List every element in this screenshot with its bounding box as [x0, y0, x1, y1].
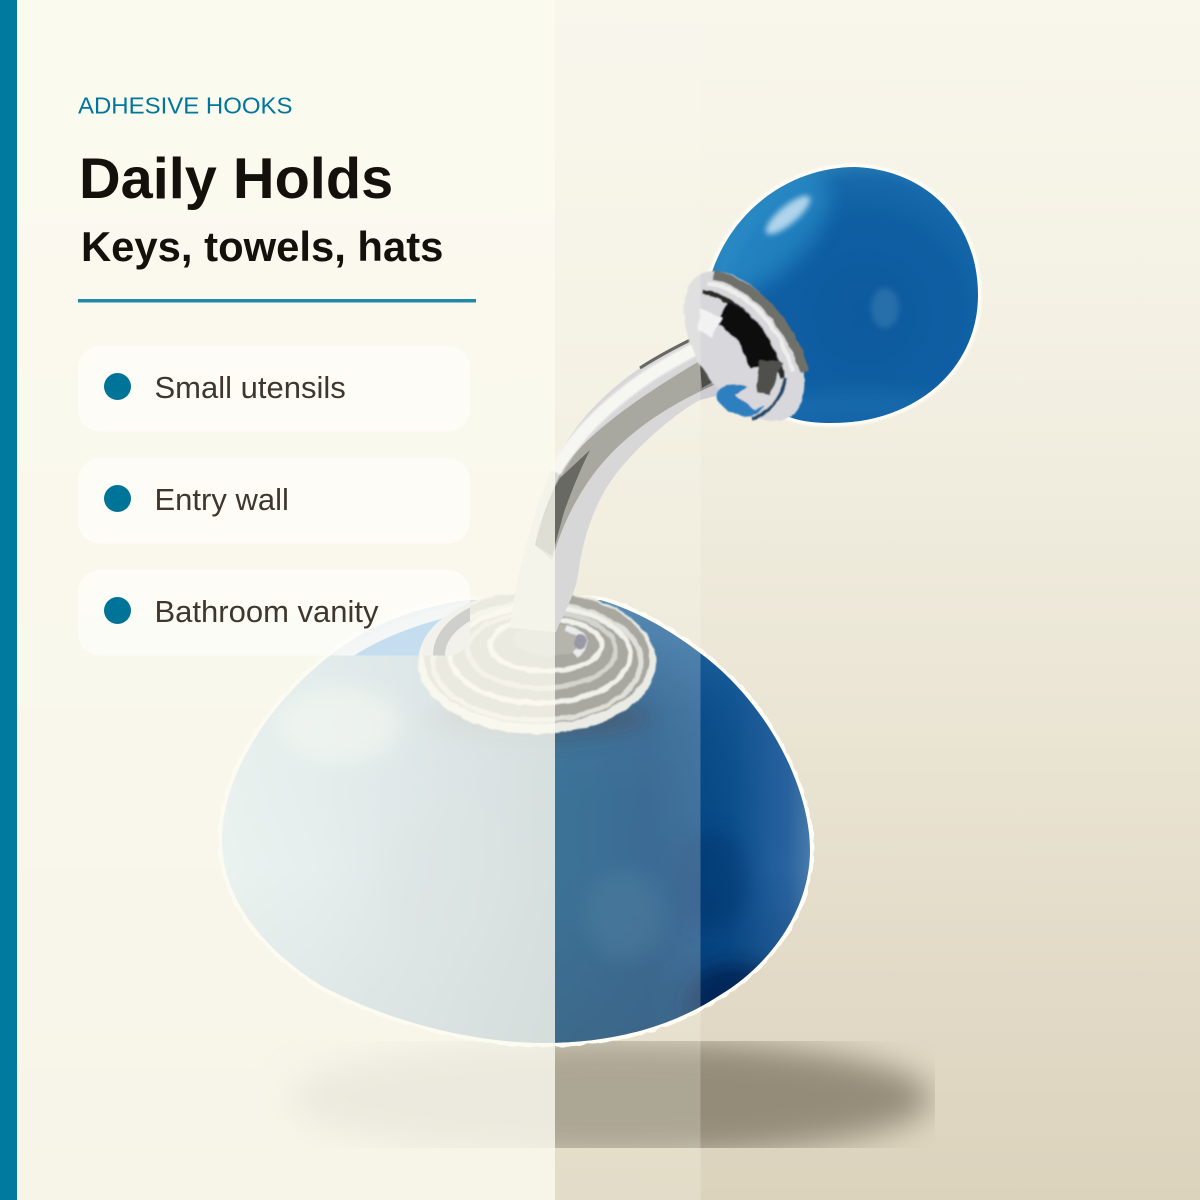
- list item: small utensils: [78, 346, 470, 432]
- hook: silver base collar: [418, 590, 656, 734]
- hook: curved metal arm: [510, 335, 742, 632]
- translucent overlay: left text panel: [0, 0, 555, 1200]
- list item: bathroom vanity: Bathroom vanity: [154, 594, 379, 629]
- left accent bar: [0, 0, 17, 1200]
- divider: [78, 299, 476, 302]
- list item: entry wall: [78, 458, 470, 544]
- hook: silver knob collar: [659, 250, 829, 442]
- list item: entry wall: Entry wall: [154, 482, 289, 517]
- product shadow: [312, 1041, 935, 1148]
- translucent overlay: middle band: [555, 0, 700, 1200]
- hook: dome base: [200, 590, 830, 1050]
- eyebrow label: ADHESIVE HOOKS: [78, 92, 292, 118]
- hook: blue ball knob: [690, 152, 978, 423]
- title: Daily Holds: [79, 147, 393, 211]
- list item: small utensils: Small utensils: [154, 370, 346, 405]
- list item: bathroom vanity: [78, 570, 470, 656]
- subtitle: Keys, towels, hats: [81, 223, 443, 270]
